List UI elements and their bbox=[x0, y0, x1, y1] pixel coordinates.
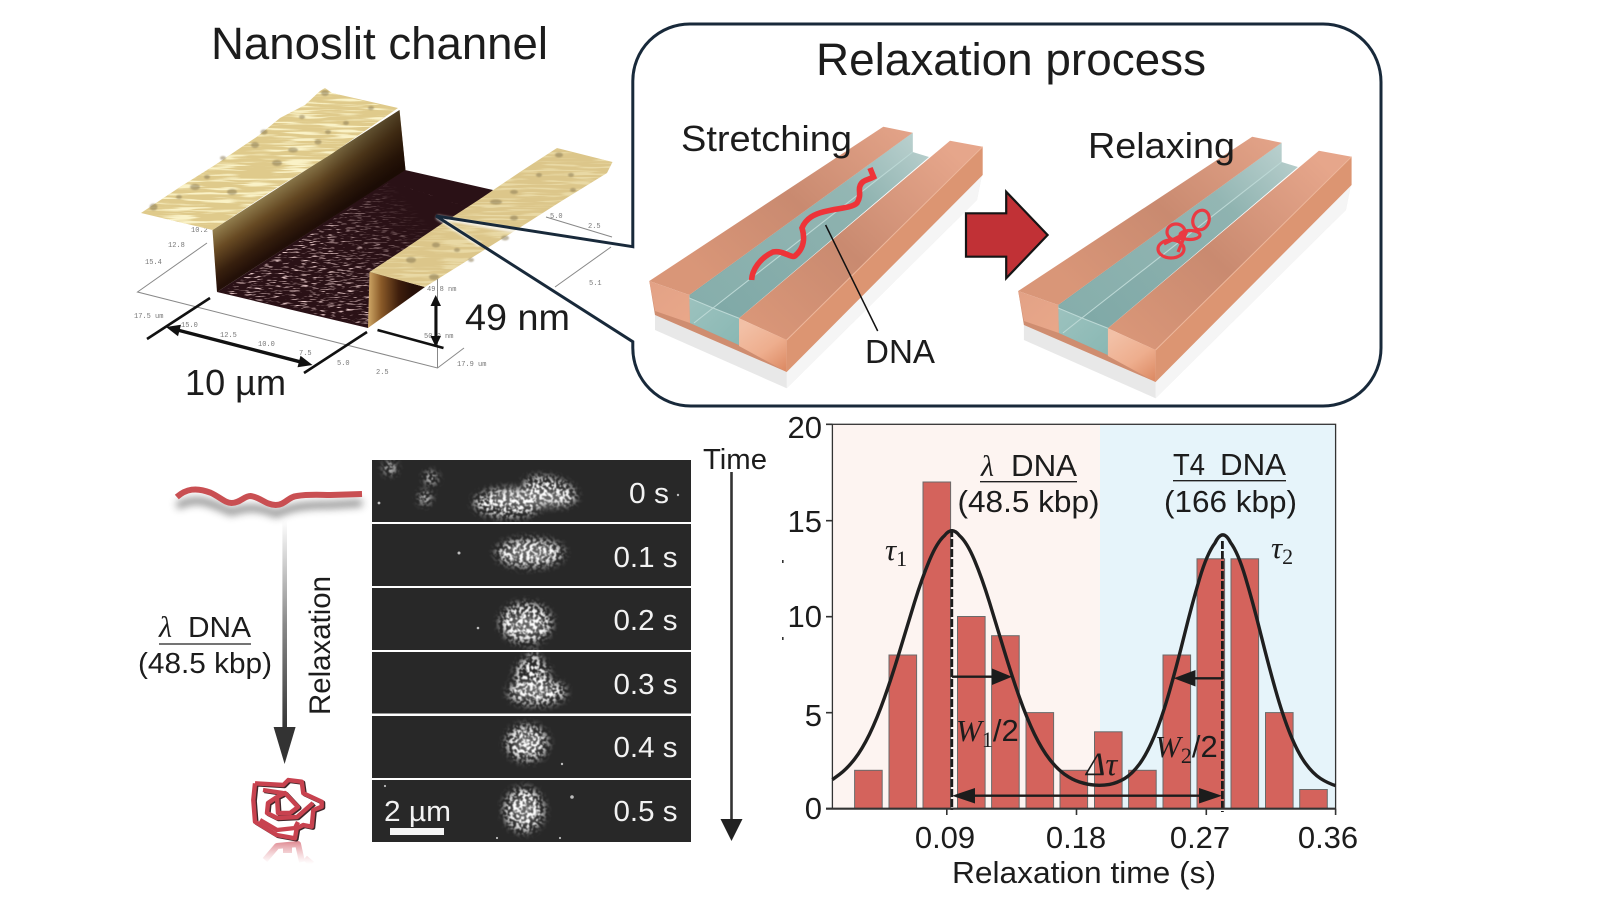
coiled DNA molecule bbox=[253, 780, 323, 864]
tau 2 label: 2 bbox=[1282, 544, 1293, 569]
DNA glow bbox=[488, 488, 572, 824]
time arrow: Time bbox=[703, 444, 767, 476]
y axis labels: 10 bbox=[788, 599, 822, 634]
AFM axes and tick labels: 2.5 bbox=[376, 369, 389, 377]
dimension: 10 µm bbox=[147, 298, 444, 403]
y axis labels: 15 bbox=[788, 504, 822, 539]
tau 1 label: τ bbox=[885, 532, 896, 567]
AFM axes and tick labels: 50.0 nm bbox=[424, 333, 453, 341]
left wall bbox=[212, 110, 406, 292]
label: lambda DNA: DNA bbox=[188, 612, 252, 644]
label: Relaxing: Relaxing bbox=[1088, 125, 1235, 166]
fluorescence micrograph frames: 0.2 s bbox=[614, 605, 678, 637]
fluorescence micrograph frames: 0.4 s bbox=[614, 732, 678, 764]
x axis labels: 0.18 bbox=[1046, 820, 1106, 855]
x axis labels: 0.36 bbox=[1298, 820, 1358, 855]
lambda DNA legend bbox=[958, 448, 1100, 519]
stray fluorescent dots bbox=[378, 494, 679, 839]
AFM axes and tick labels: 5.0 bbox=[550, 213, 563, 221]
label: lambda DNA: (48.5 kbp) bbox=[138, 648, 272, 680]
Gaussian fit curve bbox=[832, 531, 1336, 786]
lambda DNA legend: (48.5 kbp) bbox=[958, 484, 1100, 519]
title: Nanoslit channel: Nanoslit channel bbox=[211, 18, 548, 69]
frame 0 s bbox=[372, 460, 691, 522]
frame 0.4 s bbox=[372, 716, 691, 778]
width arrow W2/2 bbox=[1174, 670, 1223, 686]
T4 DNA legend: DNA bbox=[1220, 447, 1286, 482]
callout outline with pointer bbox=[436, 24, 1381, 406]
DNA coil: relaxed bbox=[1158, 208, 1212, 258]
delta tau label: Δτ bbox=[1084, 747, 1118, 783]
coil ribbon bbox=[253, 780, 322, 838]
frame 0.2 s bbox=[372, 588, 691, 650]
label: lambda DNA: λ bbox=[158, 611, 172, 644]
y axis labels: 5 bbox=[805, 698, 822, 733]
AFM axes and tick labels: 10.2 bbox=[191, 227, 208, 235]
dimension: 10 µm: 10 µm bbox=[185, 362, 286, 403]
right plateau spots bbox=[406, 152, 576, 280]
right plateau bbox=[370, 148, 612, 287]
AFM axes and tick labels: 17.9 um bbox=[457, 361, 486, 369]
T4 DNA legend: (166 kbp) bbox=[1164, 484, 1297, 519]
fluorescence micrograph frames bbox=[372, 460, 691, 842]
AFM axes and tick labels: 15.4 bbox=[145, 259, 162, 267]
W2/2 label: 2 bbox=[1181, 743, 1192, 768]
DNA strand: stretched bbox=[752, 168, 874, 280]
red process arrow bbox=[966, 192, 1048, 278]
floor far shading bbox=[222, 182, 470, 326]
label: DNA: DNA bbox=[865, 333, 935, 370]
background: lambda DNA region bbox=[832, 424, 1100, 809]
channel floor bbox=[217, 170, 493, 328]
coil dark underside bbox=[255, 781, 323, 839]
fluorescence micrograph frames: 0.3 s bbox=[614, 669, 678, 701]
AFM axes and tick labels: 5.1 bbox=[589, 280, 602, 288]
scale bar 2 µm: 2 µm bbox=[384, 796, 451, 828]
DNA speckle bbox=[384, 462, 579, 832]
frame 0.3 s bbox=[372, 652, 691, 714]
left plateau bbox=[141, 88, 398, 230]
axes frame bbox=[826, 424, 1336, 815]
T4 DNA legend: T4 bbox=[1173, 447, 1205, 482]
AFM axes and tick labels: 5.0 bbox=[337, 360, 350, 368]
stray axis marks bbox=[782, 560, 784, 640]
AFM topography of nanoslit bbox=[134, 88, 612, 377]
histogram chart bbox=[782, 410, 1358, 890]
relaxation arrow bbox=[274, 520, 296, 764]
W1/2 label: W bbox=[956, 713, 982, 748]
AFM axes and tick labels: 7.5 bbox=[299, 350, 312, 358]
AFM axes and tick labels: 15.0 bbox=[181, 322, 198, 330]
tau 2 label: τ bbox=[1271, 530, 1282, 565]
width arrow W1/2 bbox=[952, 668, 1012, 685]
fluorescence micrograph frames: 0.1 s bbox=[614, 542, 678, 574]
dimension: 49 nm: 49 nm bbox=[465, 297, 570, 338]
chip: relaxing bbox=[1018, 137, 1352, 398]
AFM axes and tick labels: 49.8 nm bbox=[427, 286, 456, 294]
histogram bars bbox=[855, 482, 1327, 809]
W2/2 label: W bbox=[1155, 729, 1181, 764]
peak markers bbox=[952, 529, 1222, 812]
lambda DNA legend: DNA bbox=[1011, 448, 1077, 483]
floor texture bbox=[222, 182, 470, 326]
infographic canvas bbox=[134, 22, 1382, 890]
AFM axes and tick labels: 12.8 bbox=[168, 242, 185, 250]
AFM axes and tick labels: 17.5 um bbox=[134, 313, 163, 321]
x axis labels bbox=[915, 820, 1358, 855]
coil reflection bbox=[265, 844, 312, 864]
label: lambda DNA bbox=[138, 611, 272, 680]
W1/2 label: /2 bbox=[993, 713, 1019, 748]
x axis title: Relaxation time (s) bbox=[952, 855, 1216, 890]
callout bubble: white fill bbox=[633, 24, 1381, 406]
x axis labels: 0.09 bbox=[915, 820, 975, 855]
time arrow bbox=[703, 444, 767, 841]
left plateau texture bbox=[141, 88, 396, 230]
chip: stretching bbox=[649, 127, 983, 388]
stretched DNA molecule bbox=[177, 489, 362, 514]
right plateau texture bbox=[370, 148, 612, 287]
x axis labels: 0.27 bbox=[1170, 820, 1230, 855]
W2/2 label: /2 bbox=[1192, 729, 1218, 764]
T4 DNA legend bbox=[1164, 447, 1297, 519]
right wall bbox=[368, 272, 425, 328]
dimension: 49 nm bbox=[430, 295, 570, 347]
lambda DNA legend: λ bbox=[980, 450, 994, 483]
time labels: 0 s bbox=[629, 478, 669, 510]
AFM axes and tick labels: 12.5 bbox=[220, 332, 237, 340]
frame 0.5 s bbox=[372, 780, 691, 842]
y axis labels: 20 bbox=[788, 410, 822, 445]
y axis labels bbox=[788, 410, 822, 826]
left wall shading bbox=[212, 110, 406, 292]
label: Stretching: Stretching bbox=[681, 118, 852, 159]
fluorescence micrograph frames: 0.5 s bbox=[614, 796, 678, 828]
AFM axes and tick labels: 2.5 bbox=[588, 223, 601, 231]
frame 0.1 s bbox=[372, 524, 691, 586]
label: Relaxation: Relaxation bbox=[304, 576, 337, 715]
y axis labels: 0 bbox=[805, 791, 822, 826]
AFM axes and tick labels bbox=[134, 213, 612, 377]
callout pointer halo bbox=[437, 217, 520, 245]
left plateau spots bbox=[150, 90, 374, 210]
AFM axes and tick labels: 10.0 bbox=[258, 341, 275, 349]
peak separation arrow bbox=[952, 788, 1222, 804]
DNA pointer line bbox=[826, 225, 878, 331]
title: Relaxation process: Relaxation process bbox=[816, 34, 1206, 85]
W1/2 label: 1 bbox=[982, 727, 993, 752]
background: T4 DNA region bbox=[1100, 424, 1336, 809]
tau 1 label: 1 bbox=[896, 546, 907, 571]
